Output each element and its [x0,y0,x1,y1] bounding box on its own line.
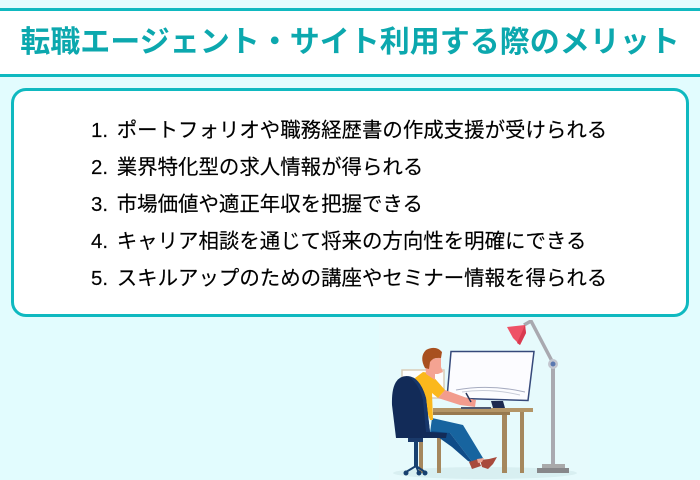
title: 転職エージェント・サイト利用する際のメリット [20,26,680,59]
title banner [0,8,700,77]
person [415,348,497,469]
list item 2: 2. 業界特化型の求人情報が得られる [91,156,423,179]
list item 1: 1. ポートフォリオや職務経歴書の作成支援が受けられる [91,119,607,142]
list item 5: 5. スキルアップのための講座やセミナー情報を得られる [91,267,607,290]
list item 3: 3. 市場価値や適正年収を把握できる [91,193,423,216]
list item 4: 4. キャリア相談を通じて将来の方向性を明確にできる [91,230,586,253]
monitor [447,352,534,408]
desk [419,407,533,473]
panel: merits list [11,88,689,317]
back paper [402,370,444,398]
illustration: person working at a desk with monitor and floor lamp [392,320,577,479]
chair [392,376,447,476]
floor lamp [507,321,569,473]
